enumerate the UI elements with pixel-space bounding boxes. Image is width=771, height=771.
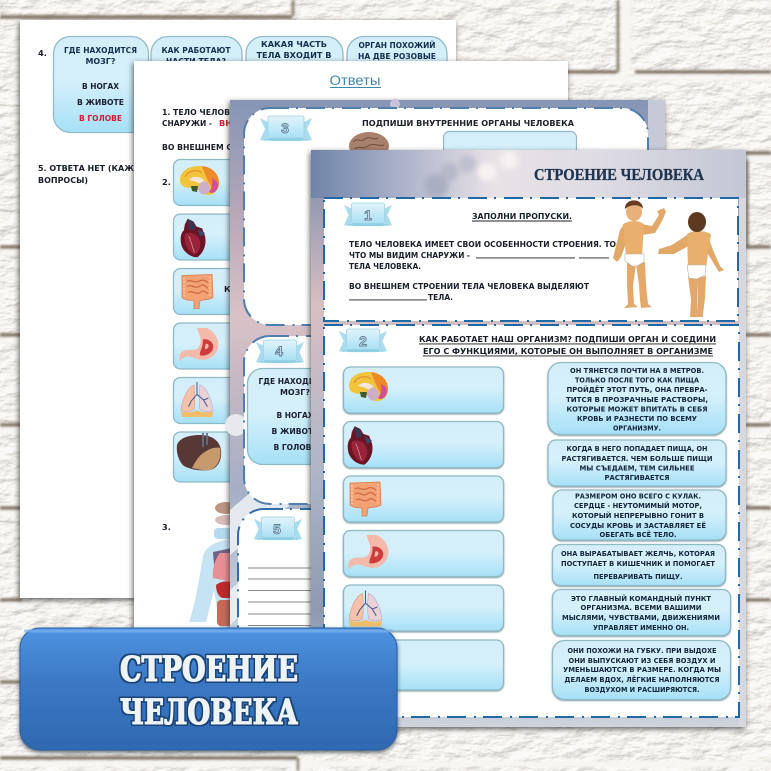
ribbon 1 bbox=[344, 203, 392, 226]
function card: heart: РАЗМЕРОМ ОНО ВСЕГО С КУЛАК. bbox=[575, 492, 701, 501]
function card: intestines: ОРГАНИЗМУ. bbox=[613, 424, 661, 432]
question 5 text bbox=[38, 163, 134, 185]
section 5 panel bbox=[238, 509, 648, 669]
function card: intestines: КРОВЬ И РАЗНЕСТИ ПО ВСЕМУ bbox=[577, 414, 697, 423]
function card: lungs: ОНИ ПОХОЖИ НА ГУБКУ. ПРИ ВЫДОХЕ bbox=[568, 646, 716, 655]
function card: intestines: КОТОРЫЕ МОЖЕТ ВПИТАТЬ В СЕБЯ bbox=[566, 404, 708, 414]
quiz card bbox=[248, 368, 340, 464]
section 2 title: КАК РАБОТАЕТ НАШ ОРГАНИЗМ? ПОДПИШИ ОРГАН И СОЕДИНИ bbox=[419, 334, 716, 344]
section 1 text: ТЕЛА. bbox=[428, 292, 453, 302]
quiz card: ГДЕ НАХОДИТСЯ bbox=[258, 376, 332, 386]
function card: liver: ОНА ВЫРАБАТЫВАЕТ ЖЕЛЧЬ, КОТОРАЯ bbox=[561, 549, 715, 558]
quiz card: body parts bbox=[151, 36, 242, 132]
quiz card: part of body: ТЕЛА ВХОДИТ В bbox=[256, 50, 332, 60]
function card: stomach: МЫ СЪЕДАЕМ, ТЕМ СИЛЬНЕЕ bbox=[580, 464, 694, 472]
function card: stomach: КОГДА В НЕГО ПОПАДАЕТ ПИЩА, ОН bbox=[566, 444, 708, 453]
section 2 title: ЕГО С ФУНКЦИЯМИ, КОТОРЫЕ ОН ВЫПОЛНЯЕТ В ОРГАНИЗМЕ bbox=[423, 346, 713, 356]
section 1 panel: fill the blanks bbox=[324, 198, 738, 321]
function card: heart: СЕРДЦЕ - НЕУТОМИМЫЙ МОТОР, bbox=[574, 501, 702, 510]
section 2 title bbox=[419, 334, 716, 356]
section 1 text bbox=[349, 239, 616, 302]
side margin bbox=[739, 198, 746, 727]
function card: liver bbox=[552, 544, 726, 586]
function card: liver: ПЕРЕВАРИВАТЬ ПИЩУ. bbox=[594, 572, 683, 581]
answer 1 text: 1. ТЕЛО ЧЕЛОВ bbox=[162, 107, 230, 117]
question number 4: 4. bbox=[38, 48, 47, 58]
answer 1 text: ВО ВНЕШНЕМ С bbox=[162, 142, 232, 152]
background beads and stripes bbox=[225, 99, 665, 625]
page: worksheet with sections 3 to 5 bbox=[225, 99, 665, 669]
organ card: empty bbox=[344, 640, 504, 690]
label box bbox=[444, 132, 576, 172]
page: answers sheet bbox=[134, 61, 568, 641]
section 4 panel bbox=[244, 336, 648, 504]
function card: brain bbox=[552, 590, 730, 636]
quiz card: brain location: МОЗГ? bbox=[86, 56, 116, 66]
function card: heart bbox=[553, 490, 726, 540]
function card: heart: СОСУДЫ КРОВЬ И ЗАСТАВЛЯЕТ ЕЁ bbox=[570, 521, 706, 530]
quiz card: pink organ: НА ДВЕ РОЗОВЫЕ bbox=[358, 51, 436, 61]
function card: lungs: УМЕНЬШАЮТСЯ В РАЗМЕРЕ. КОГДА МЫ bbox=[563, 665, 721, 674]
answer 3 number: 3. bbox=[162, 522, 171, 532]
section 1 text: ТЕЛО ЧЕЛОВЕКА ИМЕЕТ СВОИ ОСОБЕННОСТИ СТРОЕНИЯ. ТО bbox=[349, 239, 616, 249]
organ card: intestines bbox=[344, 476, 504, 522]
page: main worksheet bbox=[311, 150, 746, 727]
ribbon 2 bbox=[339, 329, 387, 352]
question 5 text: 5. ОТВЕТА НЕТ (КАЖ bbox=[38, 163, 134, 173]
section 1 text: ВО ВНЕШНЕМ СТРОЕНИИ ТЕЛА ЧЕЛОВЕКА ВЫДЕЛЯЮТ bbox=[349, 281, 589, 291]
function card: intestines bbox=[548, 362, 726, 434]
function card: intestines: ОН ТЯНЕТСЯ ПОЧТИ НА 8 МЕТРОВ. bbox=[570, 366, 704, 375]
body diagram with organs bbox=[189, 502, 237, 640]
answer 1 text: СНАРУЖИ - bbox=[162, 118, 212, 128]
organ card: intestines: К bbox=[224, 284, 231, 294]
title button bbox=[20, 628, 397, 750]
organ card: lungs bbox=[344, 585, 504, 631]
answer 2 number: 2. bbox=[162, 177, 171, 187]
quiz card: brain location: В ГОЛОВЕ bbox=[79, 113, 122, 123]
quiz card: В НОГАХ bbox=[276, 410, 314, 420]
function card: lungs: ВОЗДУХОМ И РАСШИРЯЮТСЯ. bbox=[584, 685, 700, 694]
organ card: brain bbox=[174, 160, 304, 206]
quiz card: pink organ: ОРГАН ПОХОЖИЙ bbox=[358, 39, 436, 50]
quiz card: brain location: ГДЕ НАХОДИТСЯ bbox=[64, 45, 137, 55]
function card: heart: КОТОРЫЙ НЕПРЕРЫВНО ГОНИТ В bbox=[572, 511, 704, 520]
figure: boy back bbox=[658, 212, 724, 317]
ribbon 3: 3 bbox=[281, 120, 289, 136]
function card: intestines: ТИТСЯ В ПРОЗРАЧНЫЕ РАСТВОРЫ, bbox=[566, 395, 708, 404]
quiz card: body parts: ЧАСТИ ТЕЛА? bbox=[166, 56, 226, 66]
function card: liver: ПОСТУПАЕТ В КИШЕЧНИК И ПОМОГАЕТ bbox=[561, 559, 715, 568]
button text: ЧЕЛОВЕКА bbox=[120, 692, 298, 733]
quiz card: pink organ bbox=[347, 36, 447, 132]
organ card: heart bbox=[174, 214, 304, 260]
answer 1 text: ВН bbox=[219, 118, 232, 128]
quiz card: part of body: КАКАЯ ЧАСТЬ bbox=[261, 39, 327, 49]
ribbon 3 bbox=[260, 116, 312, 141]
page: quiz questions sheet bbox=[20, 20, 456, 598]
function card: stomach: РАСТЯГИВАЕТСЯ bbox=[604, 473, 670, 482]
function card: lungs bbox=[552, 640, 730, 700]
function card: intestines: ТОЛЬКО ПОСЛЕ ТОГО КАК ПИЩА bbox=[575, 376, 699, 384]
function card: heart: ОБЕГАТЬ ВСЁ ТЕЛО. bbox=[600, 530, 677, 539]
quiz card: В ГОЛОВЕ bbox=[274, 442, 316, 452]
section 3 title: ПОДПИШИ ВНУТРЕННИЕ ОРГАНЫ ЧЕЛОВЕКА bbox=[362, 118, 575, 128]
section 2 panel: organs and functions bbox=[324, 325, 739, 717]
function card: brain: ОРГАНИЗМА. ВСЕМИ ВАШИМИ bbox=[580, 603, 702, 612]
quiz card: body parts: КАК РАБОТАЮТ bbox=[162, 45, 231, 55]
main title: СТРОЕНИЕ ЧЕЛОВЕКА bbox=[534, 165, 705, 184]
section 1 text: ЧТО МЫ ВИДИМ СНАРУЖИ - bbox=[349, 250, 470, 260]
section 1 text: ТЕЛА ЧЕЛОВЕКА. bbox=[349, 261, 421, 271]
function card: stomach bbox=[548, 440, 726, 486]
icon: grey brain bbox=[349, 132, 389, 160]
answers heading: Ответы bbox=[330, 73, 380, 88]
section 3 panel bbox=[244, 108, 648, 325]
button text: СТРОЕНИЕ bbox=[120, 649, 298, 690]
quiz card: part of body bbox=[246, 36, 343, 132]
organ card: stomach bbox=[344, 530, 504, 576]
ribbon 4: 4 bbox=[275, 343, 283, 359]
organ card: stomach bbox=[174, 323, 304, 369]
organ card: brain bbox=[344, 367, 504, 413]
ribbon 5: 5 bbox=[273, 521, 281, 537]
function card: brain: ЭТО ГЛАВНЫЙ КОМАНДНЫЙ ПУНКТ bbox=[571, 594, 711, 603]
ribbon 5 bbox=[254, 517, 302, 540]
ribbon 2: 2 bbox=[359, 333, 367, 349]
answer 1 text bbox=[162, 107, 232, 152]
organ card: heart bbox=[344, 422, 504, 468]
function card: brain: МЫСЛЯМИ, ЧУВСТВАМИ, ДВИЖЕНИЯМИ bbox=[562, 613, 720, 622]
quiz card: МОЗГ? bbox=[280, 387, 310, 397]
function card: lungs: ОНИ ВЫПУСКАЮТ ИЗ СЕБЯ ВОЗДУХ И bbox=[568, 656, 716, 665]
question 5 text: ВОПРОСЫ) bbox=[38, 175, 88, 185]
quiz card: brain location: В ЖИВОТЕ bbox=[77, 97, 124, 107]
quiz card: brain location bbox=[54, 36, 148, 132]
function card: stomach: РАСТЯГИВАЕТСЯ. ЧЕМ БОЛЬШЕ ПИЩИ bbox=[562, 454, 712, 463]
section 1 title: ЗАПОЛНИ ПРОПУСКИ. bbox=[472, 211, 572, 221]
function card: brain: УПРАВЛЯЕТ ИМЕННО ОН. bbox=[593, 623, 689, 632]
quiz card: brain location: В НОГАХ bbox=[82, 81, 120, 91]
ribbon 1: 1 bbox=[364, 207, 372, 223]
ribbon 4 bbox=[256, 340, 304, 363]
organ card: intestines bbox=[174, 268, 304, 314]
function card: intestines: ПРОЙДЁТ ЭТОТ ПУТЬ, ОНА ПРЕВРА- bbox=[566, 385, 708, 394]
organ card: liver bbox=[174, 432, 304, 482]
header banner bbox=[311, 150, 746, 198]
quiz card: В ЖИВОТЕ bbox=[272, 426, 318, 436]
organ card: lungs bbox=[174, 378, 304, 424]
button text bbox=[120, 649, 298, 733]
function card: lungs: ДЕЛАЕМ ВДОХ, ЛЁГКИЕ НАПОЛНЯЮТСЯ bbox=[564, 675, 720, 684]
figure: boy front bbox=[613, 200, 666, 308]
